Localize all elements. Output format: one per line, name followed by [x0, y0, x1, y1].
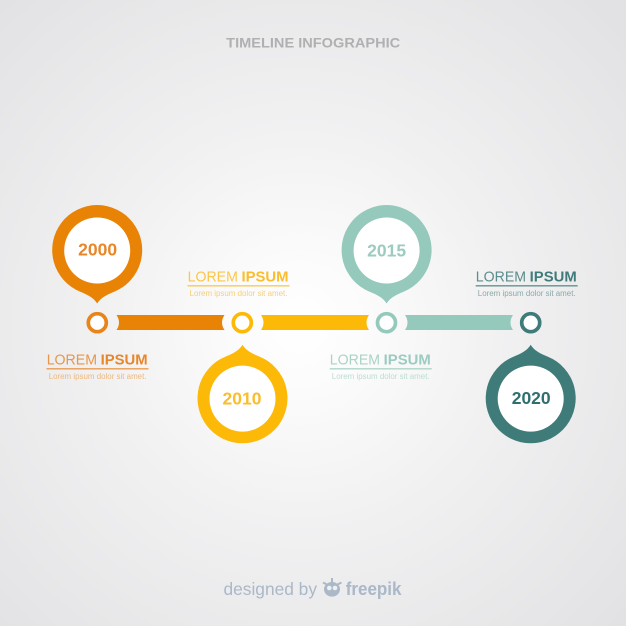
label: 2000: Lorem ipsum dolor sit amet.: [49, 372, 147, 381]
pin: 2010: [198, 345, 288, 443]
label: 2020: IPSUM: [530, 269, 577, 285]
pin: 2015: 2015: [367, 240, 406, 260]
label: 2000: [46, 352, 148, 381]
label: 2000: IPSUM: [101, 352, 148, 368]
label: 2010: Lorem ipsum dolor sit amet.: [190, 289, 287, 298]
label: 2020: LOREM: [476, 269, 526, 285]
label: 2015: [330, 352, 432, 381]
label: 2010: [188, 269, 290, 298]
label: 2000: LOREM: [47, 352, 97, 368]
credit: designed by freepik: designed by: [224, 579, 317, 599]
label: 2010: LOREM: [188, 269, 238, 285]
timeline node 2020: [522, 314, 540, 332]
pin: 2000: [52, 205, 142, 304]
pin: 2000: 2000: [78, 240, 117, 260]
pin: 2020: 2020: [512, 388, 551, 408]
label: 2020: [476, 269, 578, 298]
label: 2015: LOREM: [330, 352, 380, 368]
label: 2015: Lorem ipsum dolor sit amet.: [332, 372, 430, 381]
pin: 2010: 2010: [223, 389, 262, 409]
pin: 2015: [342, 205, 432, 304]
timeline node 2000: [88, 314, 106, 332]
connector bar: 2010 to 2015: [261, 315, 369, 330]
title: TIMELINE INFOGRAPHIC: [226, 36, 400, 50]
credit: designed by freepik: freepik: [346, 579, 402, 599]
icon: freepik mascot: [323, 578, 342, 597]
credit: designed by freepik: [224, 578, 402, 599]
label: 2020: Lorem ipsum dolor sit amet.: [478, 289, 576, 298]
connector bar: 2000 to 2010: [116, 315, 224, 330]
label: 2010: IPSUM: [242, 269, 288, 285]
timeline node 2015: [378, 314, 396, 332]
pin: 2020: [486, 345, 576, 443]
connector bar: 2015 to 2020: [405, 315, 513, 330]
timeline node 2010: [233, 314, 251, 332]
label: 2015: IPSUM: [384, 352, 431, 368]
